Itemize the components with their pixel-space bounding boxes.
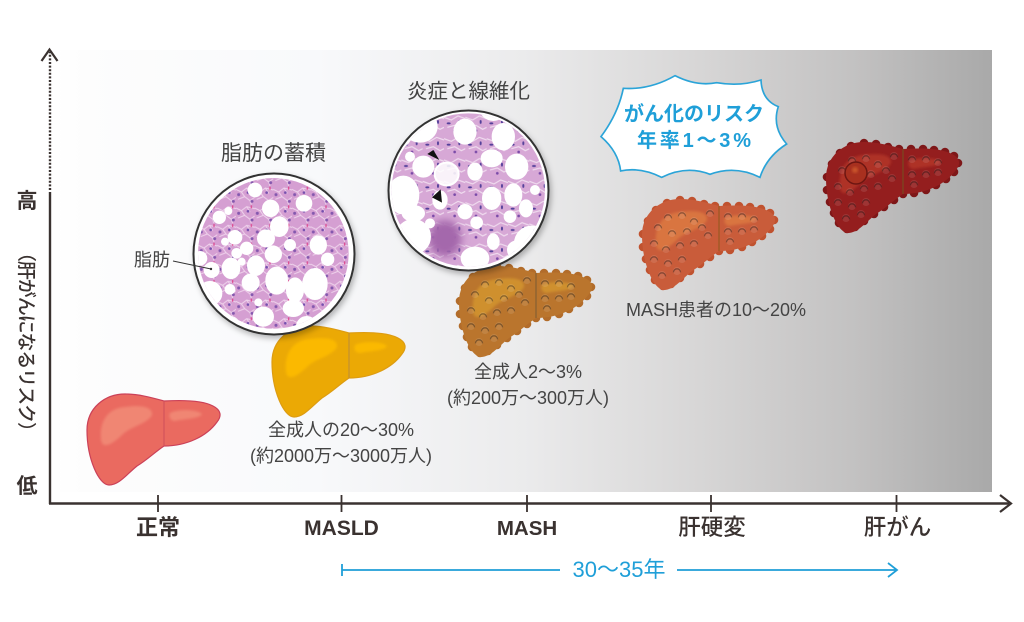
caption: cirrhosis prevalence: MASH患者の10〜20% (626, 300, 806, 320)
y axis title: （肝がんになるリスク） (15, 243, 37, 441)
x label: cirrhosis: 肝硬変 (678, 515, 746, 540)
liver: MASH brown (456, 263, 595, 357)
gradient background panel (55, 50, 992, 492)
histology circle: fat accumulation (193, 174, 354, 337)
caption: MASH prevalence: 全成人2〜3% (474, 362, 582, 382)
histology circle: inflammation and fibrosis (388, 93, 548, 271)
x label: MASLD: MASLD (304, 517, 379, 540)
callout burst: cancer risk: 年率1〜3% (637, 129, 751, 152)
y axis label high: 高 (16, 190, 38, 213)
caption: MASH prevalence: (約200万〜300万人) (447, 388, 609, 408)
liver: normal (87, 394, 220, 485)
liver: cirrhosis (639, 196, 778, 290)
x axis with arrow and ticks (49, 495, 1011, 512)
callout: fat label (134, 250, 212, 270)
heading: fat accumulation: 脂肪の蓄積 (221, 142, 326, 165)
x label: normal: 正常 (136, 515, 180, 540)
caption: MASLD prevalence: (約2000万〜3000万人) (250, 446, 432, 466)
y axis with arrow (42, 50, 58, 504)
callout: fat label: 脂肪 (134, 250, 170, 270)
callout burst: cancer risk: がん化のリスク (624, 102, 764, 126)
timeline arrow: 30 to 35 years: 30〜35年 (573, 557, 665, 582)
liver: cancer with tumor (823, 139, 962, 233)
callout burst: cancer risk (601, 76, 787, 177)
x label: MASH: MASH (497, 517, 557, 540)
x label: liver cancer: 肝がん (864, 515, 931, 540)
y axis label low: 低 (16, 475, 38, 498)
liver: fatty yellow (272, 326, 405, 417)
caption: MASH prevalence (447, 362, 609, 408)
caption: MASLD prevalence (250, 420, 432, 466)
caption: MASLD prevalence: 全成人の20〜30% (268, 420, 414, 440)
timeline arrow: 30 to 35 years (342, 557, 897, 582)
heading: inflammation and fibrosis: 炎症と線維化 (407, 80, 530, 103)
